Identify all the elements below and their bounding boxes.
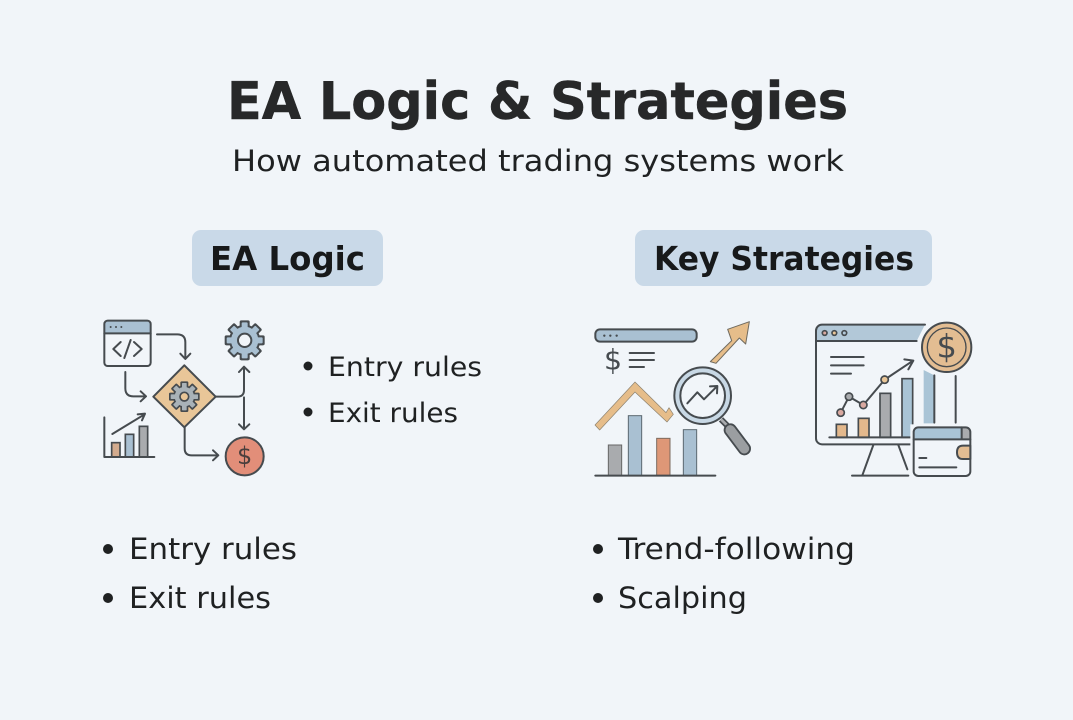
bullet list: EA Logic xyxy=(103,532,297,615)
dollar text lines: $ xyxy=(604,344,622,377)
coin xyxy=(919,320,974,375)
dollar coin: $ xyxy=(237,442,252,470)
heading: EA Logic xyxy=(192,230,383,286)
wallet xyxy=(910,424,974,479)
bar chart xyxy=(595,416,715,476)
subtitle: How automated trading systems work xyxy=(232,144,844,178)
heading: Key Strategies: Key Strategies xyxy=(654,239,914,278)
line graph xyxy=(837,359,913,416)
monitor xyxy=(816,325,925,476)
mini bar chart xyxy=(104,414,154,457)
zigzag trend line xyxy=(595,382,673,430)
dollar coin xyxy=(226,437,264,475)
heading: Key Strategies xyxy=(635,230,932,286)
dollar text lines xyxy=(604,344,654,377)
bullet list: Key Strategies: Trend-following xyxy=(617,532,855,566)
bullet list: Key Strategies: Scalping xyxy=(618,581,747,615)
browser bar xyxy=(595,329,697,342)
gear xyxy=(225,320,265,360)
bullet list: EA Logic: Entry rules xyxy=(129,532,297,566)
bullet list: flowchart side: Exit rules xyxy=(328,398,458,429)
bullet list: EA Logic: Exit rules xyxy=(129,581,271,615)
code window xyxy=(104,321,151,366)
bullet list: flowchart side: Entry rules xyxy=(328,352,482,383)
icon: EA logic flowchart xyxy=(104,320,265,475)
up arrow xyxy=(710,322,749,363)
icon: trend analysis with magnifier xyxy=(595,322,749,476)
magnifying glass xyxy=(674,367,744,449)
bullet list: flowchart side xyxy=(304,352,482,429)
bars xyxy=(829,370,956,437)
coin: $ xyxy=(936,327,957,365)
heading: EA Logic: EA Logic xyxy=(210,239,365,278)
bullet list: Key Strategies xyxy=(593,532,855,615)
icon: monitor dashboard with coin and wallet xyxy=(816,320,974,479)
flow arrows xyxy=(125,334,249,460)
decision diamond with gear xyxy=(153,365,216,427)
title: EA Logic & Strategies xyxy=(227,72,848,132)
